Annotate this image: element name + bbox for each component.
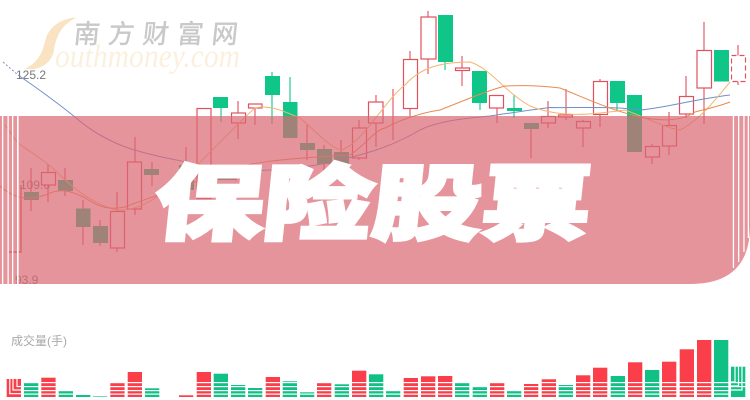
- axis label: 125.2: 125.2: [16, 68, 46, 82]
- panel edge stripes: [2, 116, 749, 284]
- volume chart label: 成交量(手): [11, 333, 67, 348]
- pink title panel: [0, 116, 750, 284]
- title: 保险股票: 保险股票: [150, 138, 598, 257]
- volume bar chart: [7, 340, 745, 397]
- watermark: southmoney logo: outhmoney.com: [55, 39, 240, 75]
- watermark: southmoney logo: 南方财富网: [72, 19, 240, 49]
- axis label: 93.9: 93.9: [15, 273, 39, 287]
- moving average lines: [0, 62, 730, 210]
- volume corner stripes: [10, 366, 742, 394]
- watermark: southmoney logo: [25, 18, 240, 75]
- volume bar horizontal white bands: [22, 382, 750, 395]
- candlestick chart: [8, 11, 746, 252]
- axis label: 109.6: 109.6: [20, 178, 50, 192]
